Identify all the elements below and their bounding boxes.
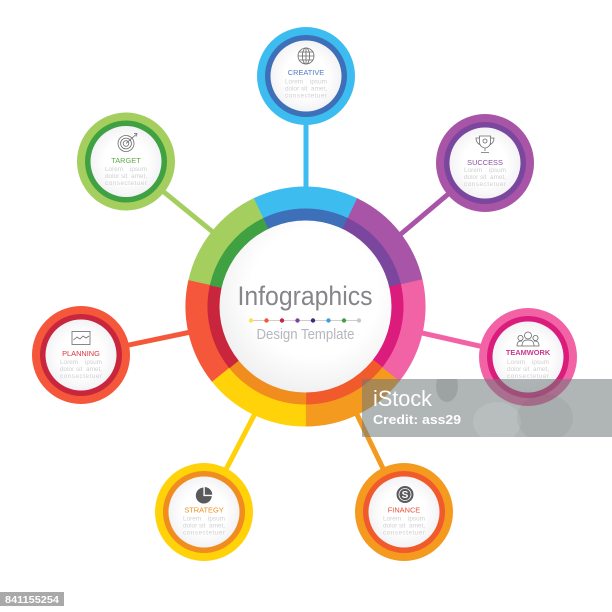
connector lines [81,76,528,512]
node: teamwork [479,308,577,406]
body text [105,166,148,187]
body text: dolor sit [464,174,487,181]
label: finance: FINANCE [388,506,420,514]
body text: Lorem [464,167,482,174]
watermark band [362,379,612,437]
icon: trophy [476,136,494,152]
body text: dolor sit [183,522,206,530]
watermark brand: iStock [373,386,433,411]
body text: Lorem [383,516,401,522]
node: strategy [155,463,253,561]
node: planning [32,306,130,404]
body text: consectetuer [507,373,550,380]
body text [60,359,103,380]
body text: Lorem [507,359,525,366]
body text: amet, [533,366,549,373]
label: strategy: STRATEGY [184,506,224,514]
body text: consectetuer [464,181,507,188]
body text: dolor sit [507,366,530,373]
body text: ipsum [130,166,147,173]
body text: Lorem [60,359,78,366]
body text: consectetuer [383,530,426,536]
body text: ipsum [310,78,327,86]
body text [507,359,550,380]
body text: ipsum [85,359,102,366]
body text: dolor sit [383,522,406,530]
timeline of dots [249,318,361,323]
body text: dolor sit [105,173,128,180]
title: Infographics [238,281,372,311]
body text: ipsum [489,167,506,174]
body text: ipsum [532,359,549,366]
body text: Lorem [105,166,123,173]
body text: amet, [409,522,425,530]
icon: target [118,134,137,152]
node: creative [257,27,355,125]
body text: consectetuer [285,92,328,100]
outer ring segments [153,154,458,459]
label: target: TARGET [111,156,141,165]
central hub ring [153,154,458,459]
inner ring segments [177,178,434,435]
body text: amet, [490,174,506,181]
body text [383,516,426,536]
label: success: SUCCESS [467,158,503,167]
body text [464,167,507,188]
body text: Lorem [285,78,303,86]
body text: dolor sit [60,366,83,373]
icon: chart [72,332,90,344]
watermark credit: Credit: ass29 [373,413,461,427]
icon: coin: S [402,490,409,501]
body text [285,78,328,100]
image id tag [0,592,64,606]
node: success [436,114,534,212]
body text: amet, [131,173,147,180]
body text: consectetuer [183,530,226,536]
label: teamwork: TEAMWORK [506,348,551,357]
icon: globe [298,48,314,64]
subtitle: Design Template [256,327,354,343]
body text: ipsum [408,516,425,522]
body text: amet, [86,366,102,373]
body text: Lorem [183,516,201,522]
body text: dolor sit [285,86,308,92]
body text: amet, [311,86,327,92]
body text [183,516,226,536]
body text: consectetuer [105,180,148,187]
icon: people [517,332,539,346]
node: finance [355,463,453,561]
label: planning: PLANNING [62,349,100,358]
label: creative: CREATIVE [288,68,324,77]
body text: consectetuer [60,373,103,380]
central white disk [220,220,392,392]
body text: amet, [209,522,225,530]
node: target [77,112,175,210]
icon: pie chart [196,487,212,503]
body text: ipsum [208,516,225,522]
image id tag: 841155254 [5,594,59,606]
